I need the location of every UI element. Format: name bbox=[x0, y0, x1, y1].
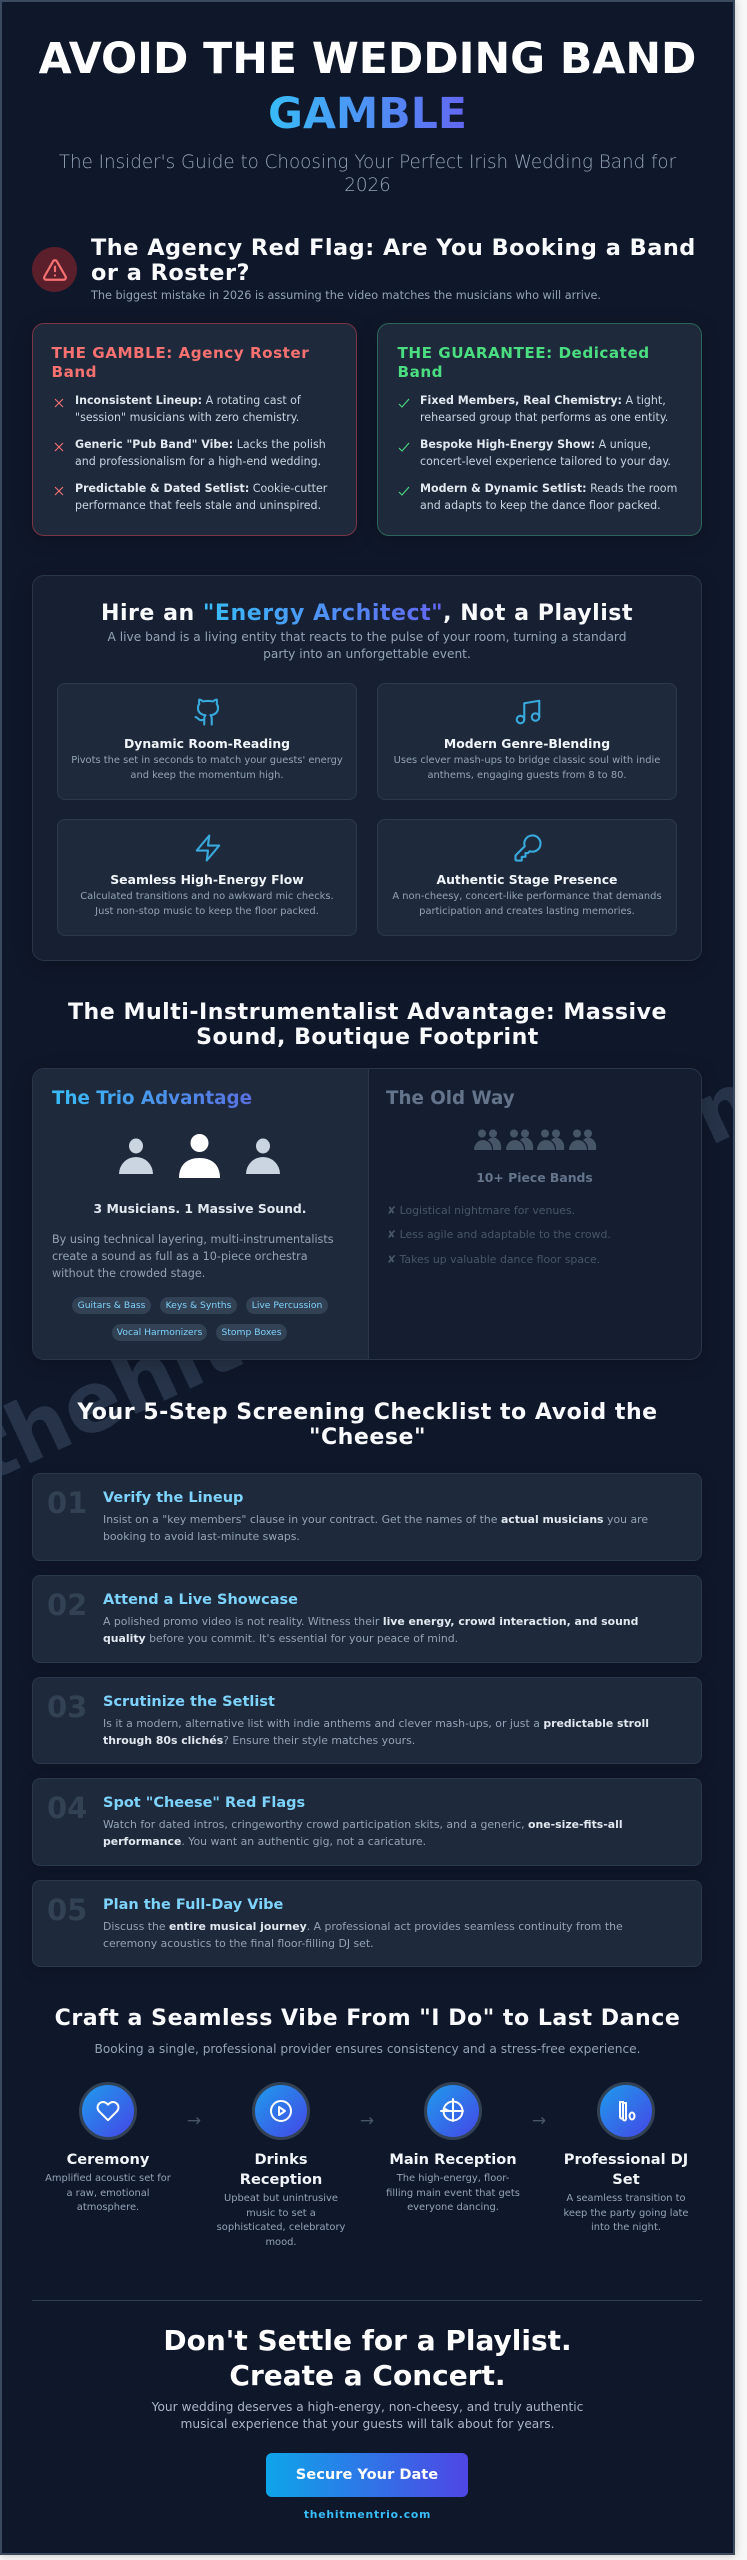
trio heading: The Trio Advantage bbox=[52, 1088, 252, 1109]
call-to-action heading: Don't Settle for a Playlist. bbox=[163, 2324, 572, 2357]
timeline step: ceremony bbox=[45, 2082, 171, 2213]
title bbox=[38, 34, 696, 139]
step text bbox=[103, 1513, 648, 1543]
timeline text: filling main event that gets bbox=[386, 2188, 520, 2199]
gamble item 2 bbox=[54, 438, 326, 468]
step text bbox=[103, 1615, 638, 1645]
step text: ceremony acoustics to the final floor-filling DJ set. bbox=[103, 1937, 374, 1950]
heading: agency red flag: The Agency Red Flag: Are You Booking a Band bbox=[91, 235, 696, 261]
timeline text: music to set a bbox=[246, 2208, 316, 2219]
timeline title: Professional DJ bbox=[564, 2151, 688, 2168]
heading: seamless vibe: Craft a Seamless Vibe From "I Do" to Last Dance bbox=[55, 2005, 680, 2031]
panel: the guarantee bbox=[377, 323, 702, 536]
energy subheading bbox=[108, 630, 626, 661]
timeline text: The high-energy, floor- bbox=[397, 2173, 509, 2184]
step text: Insist on a "key members" clause in your contract. Get the names of the actual musicians you are bbox=[103, 1513, 648, 1526]
heading: multi-instrumentalist: Sound, Boutique Footprint bbox=[196, 1024, 539, 1050]
tag bbox=[246, 1297, 328, 1314]
icon: github cat bbox=[194, 698, 220, 726]
icon: heart bbox=[79, 2082, 137, 2140]
step text: performance. You want an authentic gig, not a caricature. bbox=[103, 1835, 426, 1848]
call-to-action text: musical experience that your guests will talk about for years. bbox=[180, 2417, 555, 2431]
timeline text bbox=[45, 2173, 171, 2213]
step title: Verify the Lineup bbox=[103, 1490, 243, 1506]
heading: multi-instrumentalist bbox=[68, 999, 667, 1050]
guarantee item 1: rehearsed group that performs as one entity. bbox=[420, 411, 668, 424]
step number: 05 bbox=[47, 1893, 87, 1927]
card text: A non-cheesy, concert-like performance that demands bbox=[392, 891, 662, 902]
step number: 01 bbox=[47, 1486, 87, 1520]
card text: Calculated transitions and no awkward mic checks. bbox=[80, 891, 334, 902]
icon: key bbox=[514, 834, 542, 862]
energy subheading: A live band is a living entity that reacts to the pulse of your room, turning a standard bbox=[108, 630, 626, 644]
tag bbox=[72, 1297, 151, 1314]
card text bbox=[394, 755, 660, 781]
timeline text bbox=[217, 2193, 345, 2248]
trio text: By using technical layering, multi-instrumentalists bbox=[52, 1233, 334, 1246]
tag: Vocal Harmonizers bbox=[117, 1327, 202, 1338]
trio text bbox=[52, 1233, 334, 1280]
timeline title: Main Reception bbox=[389, 2151, 517, 2168]
arrow: → bbox=[360, 2111, 374, 2131]
guarantee heading bbox=[398, 344, 650, 381]
step text bbox=[103, 1920, 623, 1950]
subtitle: 2026 bbox=[344, 174, 391, 196]
timeline step: main reception bbox=[386, 2082, 520, 2213]
timeline text: sophisticated, celebratory bbox=[217, 2222, 345, 2233]
card title: Seamless High-Energy Flow bbox=[110, 872, 304, 887]
heading: agency red flag bbox=[91, 235, 696, 286]
timeline text: into the night. bbox=[591, 2222, 661, 2233]
step text: quality before you commit. It's essential for your peace of mind. bbox=[103, 1632, 458, 1645]
tag: Stomp Boxes bbox=[222, 1327, 282, 1338]
step number: 02 bbox=[47, 1588, 87, 1622]
icon: dj bbox=[597, 2082, 655, 2140]
timeline text bbox=[368, 2172, 538, 2216]
tag: Guitars & Bass bbox=[78, 1300, 145, 1311]
subheading: agency red flag: The biggest mistake in 2026 is assuming the video matches the musicians who will arrive. bbox=[91, 289, 601, 302]
heading: agency red flag: or a Roster? bbox=[91, 260, 250, 286]
card text bbox=[392, 891, 662, 917]
arrow: → bbox=[532, 2111, 546, 2131]
timeline text: everyone dancing. bbox=[407, 2202, 499, 2213]
gamble heading: Band bbox=[52, 363, 97, 381]
step 1 bbox=[32, 1473, 702, 1561]
card text bbox=[71, 755, 343, 781]
subtitle bbox=[59, 152, 676, 196]
timeline text: a raw, emotional bbox=[66, 2188, 150, 2199]
subtitle: The Insider's Guide to Choosing Your Perfect Irish Wedding Band for bbox=[59, 152, 676, 173]
step title: Attend a Live Showcase bbox=[103, 1592, 298, 1608]
tag bbox=[160, 1297, 237, 1314]
timeline title: Ceremony bbox=[67, 2151, 149, 2168]
guarantee item 3 bbox=[398, 482, 677, 512]
website link: thehitmentrio.com bbox=[304, 2508, 431, 2521]
timeline text: Upbeat but unintrusive bbox=[224, 2193, 338, 2204]
step text: Is it a modern, alternative list with indie anthems and clever mash-ups, or just a predictable stroll bbox=[103, 1717, 649, 1730]
guarantee heading: THE GUARANTEE: Dedicated bbox=[398, 344, 650, 362]
icon: ten piece band bbox=[474, 1130, 596, 1150]
timeline text: mood. bbox=[265, 2237, 297, 2248]
card text: and keep the momentum high. bbox=[130, 770, 284, 781]
old way list: ✘ Logistical nightmare for venues. bbox=[387, 1204, 575, 1217]
timeline text: keep the party going late bbox=[564, 2208, 688, 2219]
energy subheading: party into an unforgettable event. bbox=[263, 647, 471, 661]
guarantee item 1 bbox=[398, 394, 668, 424]
step text: booking to avoid last-minute swaps. bbox=[103, 1530, 300, 1543]
icon: three musicians bbox=[119, 1134, 280, 1178]
icon: zap bbox=[196, 834, 220, 862]
tag bbox=[216, 1324, 287, 1341]
guarantee item 2: concert-level experience tailored to your day. bbox=[420, 455, 671, 468]
button: Secure Your Date bbox=[296, 2466, 438, 2483]
timeline step: drinks bbox=[217, 2082, 345, 2248]
tag: Live Percussion bbox=[252, 1300, 322, 1311]
energy heading: Hire an "Energy Architect", Not a Playlist bbox=[101, 600, 633, 626]
step 3 bbox=[32, 1677, 702, 1764]
heading: checklist bbox=[77, 1399, 658, 1450]
timeline text: Amplified acoustic set for bbox=[45, 2173, 171, 2184]
trio text: create a sound as full as a 10-piece orchestra bbox=[52, 1250, 308, 1263]
timeline text bbox=[541, 2192, 711, 2236]
gamble item 2: Generic "Pub Band" Vibe: Lacks the polish bbox=[75, 438, 326, 451]
subheading: seamless vibe: Booking a single, professional provider ensures consistency and a stress-free experience. bbox=[94, 2042, 641, 2056]
card text: anthems, engaging guests from 8 to 80. bbox=[427, 770, 627, 781]
call-to-action heading: Create a Concert. bbox=[229, 2359, 506, 2392]
card text: Uses clever mash-ups to bridge classic soul with indie bbox=[394, 755, 660, 766]
timeline text: A seamless transition to bbox=[566, 2193, 686, 2204]
icon: warning bbox=[32, 247, 77, 292]
trio column bbox=[33, 1069, 369, 1359]
step text bbox=[103, 1717, 649, 1747]
title: GAMBLE bbox=[268, 89, 467, 139]
call-to-action heading bbox=[0, 2323, 735, 2393]
card title: Dynamic Room-Reading bbox=[124, 736, 290, 751]
step title: Spot "Cheese" Red Flags bbox=[103, 1795, 305, 1811]
step title: Plan the Full-Day Vibe bbox=[103, 1897, 283, 1913]
guarantee item 2: Bespoke High-Energy Show: A unique, bbox=[420, 438, 651, 451]
gamble item 3 bbox=[54, 482, 328, 512]
call-to-action text bbox=[0, 2399, 735, 2434]
old way heading: The Old Way bbox=[386, 1088, 515, 1109]
trio tagline: 3 Musicians. 1 Massive Sound. bbox=[94, 1201, 306, 1216]
gamble item 1 bbox=[54, 394, 301, 424]
divider bbox=[32, 2300, 702, 2301]
old way caption: 10+ Piece Bands bbox=[476, 1170, 593, 1185]
step text: Watch for dated intros, cringeworthy crowd participation skits, and a generic, one-size-fits-all bbox=[103, 1818, 623, 1831]
step 4 bbox=[32, 1778, 702, 1866]
gamble item 1: "session" musicians with zero chemistry. bbox=[75, 411, 299, 424]
gamble heading bbox=[52, 344, 309, 381]
guarantee item 2 bbox=[398, 438, 671, 468]
heading: multi-instrumentalist: The Multi-Instrumentalist Advantage: Massive bbox=[68, 999, 667, 1025]
step number: 04 bbox=[47, 1791, 87, 1825]
timeline title: Drinks bbox=[254, 2151, 308, 2168]
card title: Authentic Stage Presence bbox=[437, 872, 617, 887]
card: dynamic room-reading bbox=[57, 683, 357, 800]
card text: Pivots the set in seconds to match your guests' energy bbox=[71, 755, 343, 766]
guarantee item 1: Fixed Members, Real Chemistry: A tight, bbox=[420, 394, 666, 407]
gamble heading: THE GAMBLE: Agency Roster bbox=[52, 344, 309, 362]
title: AVOID THE WEDDING BAND bbox=[39, 34, 696, 84]
card: stage presence bbox=[377, 819, 677, 936]
gamble item 2: and professionalism for a high-end wedding. bbox=[75, 455, 321, 468]
gamble item 3: Predictable & Dated Setlist: Cookie-cutter bbox=[75, 482, 327, 495]
heading: checklist: Your 5-Step Screening Checklist to Avoid the bbox=[77, 1399, 658, 1425]
icon: crosshair bbox=[424, 2082, 482, 2140]
step title: Scrutinize the Setlist bbox=[103, 1694, 275, 1710]
arrow: → bbox=[187, 2111, 201, 2131]
button bbox=[266, 2453, 468, 2497]
panel: the gamble bbox=[32, 323, 357, 536]
step 2 bbox=[32, 1575, 702, 1663]
old way list bbox=[387, 1204, 611, 1266]
step text: Discuss the entire musical journey. A professional act provides seamless continuity from the bbox=[103, 1920, 623, 1933]
step text: through 80s clichés? Ensure their style matches yours. bbox=[103, 1734, 415, 1747]
guarantee heading: Band bbox=[398, 363, 443, 381]
icon: music bbox=[516, 700, 540, 724]
icon: play bbox=[252, 2082, 310, 2140]
timeline title bbox=[541, 2150, 711, 2189]
timeline title: Set bbox=[612, 2170, 640, 2188]
card text bbox=[80, 891, 334, 917]
guarantee item 3: and adapts to keep the dance floor packed. bbox=[420, 499, 661, 512]
old way column bbox=[386, 1088, 611, 1266]
timeline step: dj set bbox=[541, 2082, 711, 2242]
step text: A polished promo video is not reality. Witness their live energy, crowd interaction, and sound bbox=[103, 1615, 638, 1628]
card title: Modern Genre-Blending bbox=[444, 736, 610, 751]
step number: 03 bbox=[47, 1690, 87, 1724]
heading: checklist: "Cheese" bbox=[309, 1424, 426, 1450]
gamble item 3: performance that feels stale and uninspired. bbox=[75, 499, 321, 512]
old way list: ✘ Less agile and adaptable to the crowd. bbox=[387, 1228, 611, 1241]
card: modern genre-blending bbox=[377, 683, 677, 800]
panel: comparison bbox=[32, 1068, 702, 1360]
panel: energy architect bbox=[32, 575, 702, 961]
guarantee item 3: Modern & Dynamic Setlist: Reads the room bbox=[420, 482, 677, 495]
timeline title bbox=[240, 2151, 322, 2188]
step text bbox=[103, 1818, 623, 1848]
tag bbox=[112, 1324, 207, 1341]
old way list: ✘ Takes up valuable dance floor space. bbox=[387, 1253, 600, 1266]
timeline title: Reception bbox=[240, 2170, 322, 2188]
timeline text: atmosphere. bbox=[77, 2202, 139, 2213]
step 5 bbox=[32, 1880, 702, 1967]
card: seamless flow bbox=[57, 819, 357, 936]
call-to-action text: Your wedding deserves a high-energy, non-cheesy, and truly authentic bbox=[152, 2400, 583, 2414]
card text: participation and creates lasting memories. bbox=[419, 906, 635, 917]
tag: Keys & Synths bbox=[166, 1300, 231, 1311]
card text: Just non-stop music to keep the floor packed. bbox=[95, 906, 319, 917]
gamble item 1: Inconsistent Lineup: A rotating cast of bbox=[75, 394, 301, 407]
trio text: without the crowded stage. bbox=[52, 1267, 205, 1280]
